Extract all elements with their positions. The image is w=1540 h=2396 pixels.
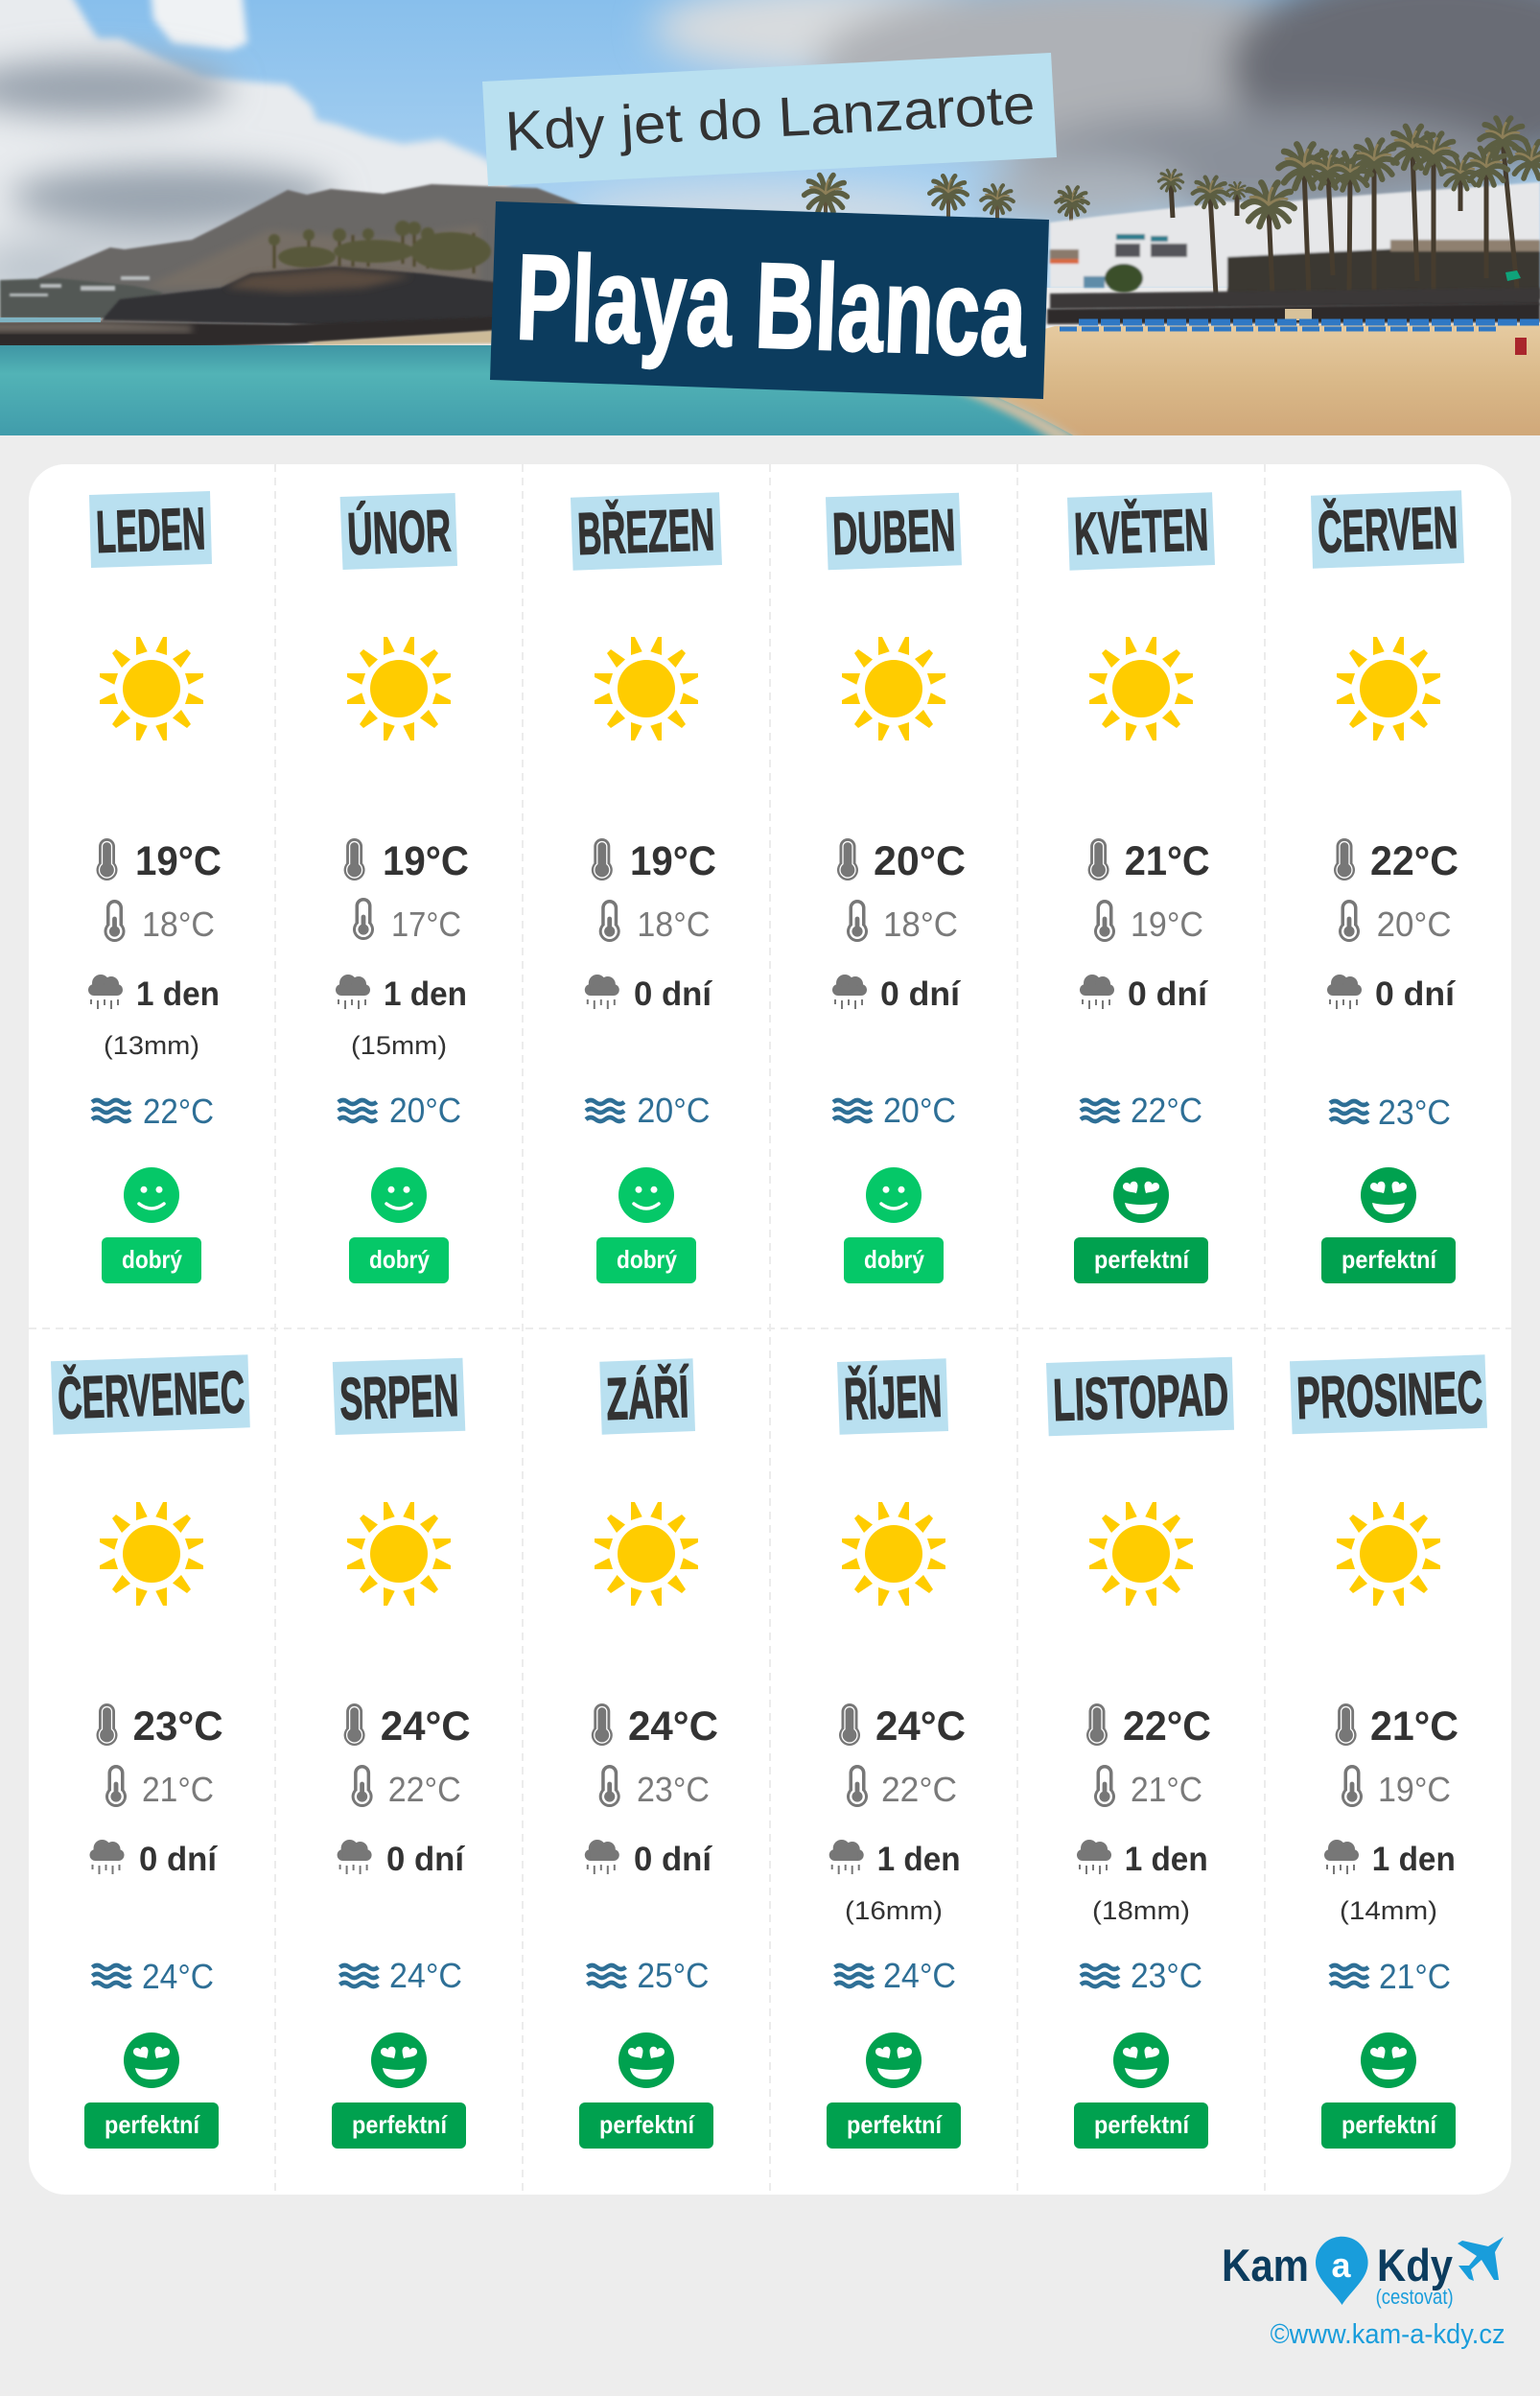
icon: love face (618, 2032, 674, 2088)
header title: Playa Blanca: Playa Blanca (514, 228, 1030, 383)
rating badge (332, 2102, 466, 2149)
icon: plane (1458, 2237, 1504, 2281)
icon: thermometer high (592, 1703, 613, 1746)
logo word: Kam: Kam (1222, 2240, 1309, 2290)
low temperature: 21°C (142, 1770, 214, 1809)
low temperature: 22°C (881, 1770, 957, 1809)
month label: ZÁŘÍ (605, 1364, 690, 1433)
high temperature: 24°C (875, 1703, 966, 1750)
icon: thermometer low (1339, 900, 1360, 942)
icon: thermometer low (104, 900, 125, 942)
sand (997, 324, 1540, 435)
high temperature: 24°C (381, 1703, 471, 1750)
rainfall: (18mm) (1092, 1896, 1190, 1925)
icon: sun (1337, 637, 1440, 740)
rating badge (844, 1237, 944, 1283)
rainy days: 1 den (136, 975, 220, 1013)
far shore (0, 278, 163, 318)
panel: DUBEN (826, 493, 966, 1283)
rainy days: 1 den (1125, 1841, 1208, 1878)
icon: waves (1330, 1965, 1368, 1986)
month label (1067, 492, 1215, 571)
water temperature: 24°C (389, 1956, 462, 1995)
water temperature: 20°C (389, 1091, 461, 1130)
icon: waves (1330, 1101, 1368, 1122)
icon: thermometer low (599, 900, 620, 942)
header tag: Kdy jet do Lanzarote (482, 53, 1057, 186)
icon: love face (866, 2032, 922, 2088)
rating badge: dobrý (617, 1245, 677, 1274)
rating badge: perfektní (1094, 1245, 1190, 1274)
month label (599, 1358, 695, 1435)
rating badge (102, 1237, 201, 1283)
icon: love face (1113, 2032, 1169, 2088)
water temperature: 22°C (1131, 1091, 1202, 1130)
rating badge (596, 1237, 696, 1283)
icon: waves (1081, 1965, 1119, 1986)
low temperature: 21°C (1131, 1770, 1202, 1809)
icon: smiley (371, 1167, 427, 1223)
water temperature: 21°C (1379, 1957, 1451, 1996)
icon: love face (124, 2032, 179, 2088)
icon: smiley (124, 1167, 179, 1223)
high temperature: 19°C (135, 838, 222, 884)
month label: LEDEN (95, 496, 206, 566)
icon: sun (842, 637, 945, 740)
low temperature: 19°C (1131, 904, 1203, 944)
icon: sun (100, 637, 203, 740)
high temperature: 19°C (383, 838, 469, 884)
icon: thermometer high (837, 838, 858, 881)
cliff palms (268, 221, 491, 273)
rainy days: 0 dní (1128, 975, 1208, 1013)
icon: thermometer high (96, 1703, 117, 1746)
month label (1046, 1357, 1234, 1436)
rating badge (1321, 2102, 1456, 2149)
low temperature: 20°C (1377, 904, 1452, 944)
rainy days: 1 den (384, 975, 467, 1013)
water temperature: 22°C (143, 1092, 214, 1131)
rating badge (349, 1237, 449, 1283)
rating badge: perfektní (1342, 2110, 1437, 2139)
low temperature: 18°C (142, 904, 215, 944)
icon: sun (595, 1502, 698, 1606)
rating badge: perfektní (847, 2110, 943, 2139)
icon: rain cloud (336, 975, 370, 1009)
rating badge: dobrý (864, 1245, 924, 1274)
high temperature: 22°C (1370, 838, 1458, 884)
sea (0, 345, 1074, 435)
icon: thermometer high (344, 1703, 365, 1746)
month label: SRPEN (338, 1363, 459, 1433)
high temperature: 21°C (1125, 838, 1210, 884)
icon: thermometer high (1088, 838, 1109, 881)
breakwater (0, 317, 492, 345)
icon: love face (371, 2032, 427, 2088)
high temperature: 19°C (630, 838, 716, 884)
icon: thermometer low (352, 1765, 373, 1807)
rainy days: 0 dní (1375, 975, 1456, 1013)
month label: DUBEN (831, 498, 956, 568)
icon: love face (1361, 1167, 1416, 1223)
rating badge (1074, 2102, 1208, 2149)
icon: waves (587, 1965, 625, 1986)
low temperature: 19°C (1378, 1770, 1451, 1809)
rating badge (1074, 1237, 1208, 1283)
water temperature: 20°C (637, 1091, 710, 1130)
panel: ŘÍJEN (827, 1358, 966, 2149)
header photo: Playa Blanca beach (0, 0, 1540, 441)
rainfall: (15mm) (351, 1031, 447, 1060)
icon: rain cloud (829, 1840, 864, 1874)
icon: rain cloud (1324, 1840, 1359, 1874)
icon: waves (1081, 1100, 1119, 1121)
month label: ÚNOR (346, 498, 452, 568)
rating badge (827, 2102, 961, 2149)
water temperature: 24°C (883, 1956, 956, 1995)
website credit: ©www.kam-a-kdy.cz (1271, 2319, 1505, 2350)
white clouds left (0, 0, 508, 288)
icon: sun (595, 637, 698, 740)
water temperature: 20°C (883, 1091, 956, 1130)
panel: LISTOPAD (1046, 1357, 1234, 2149)
icon: thermometer high (1334, 838, 1355, 881)
icon: rain cloud (1327, 975, 1362, 1009)
icon: map pin with a: a (1331, 2245, 1351, 2285)
icon: thermometer low (847, 900, 868, 942)
month label (51, 1354, 250, 1435)
low temperature: 18°C (637, 904, 710, 944)
icon: rain cloud (585, 1840, 619, 1874)
grey clouds right (575, 0, 1540, 245)
icon: map pin with a (1316, 2237, 1368, 2305)
rainy days: 1 den (877, 1841, 961, 1878)
rating badge: perfektní (352, 2110, 448, 2139)
high temperature: 24°C (628, 1703, 718, 1750)
rating badge: perfektní (1094, 2110, 1190, 2139)
icon: rain cloud (1077, 1840, 1111, 1874)
icon: rain cloud (88, 975, 123, 1009)
rating badge: perfektní (599, 2110, 695, 2139)
white buildings (1050, 182, 1540, 299)
panel: ÚNOR (336, 493, 469, 1283)
panel: LEDEN (88, 491, 222, 1283)
low temperature: 18°C (883, 904, 958, 944)
month label (89, 491, 212, 568)
logo: Kam a Kdy (cestovat) (1222, 2237, 1504, 2309)
far palms (824, 200, 1073, 222)
cliff (101, 267, 503, 328)
icon: sun (347, 637, 451, 740)
month label (837, 1358, 948, 1435)
panel: ZÁŘÍ (579, 1358, 718, 2149)
icon: sun (842, 1502, 945, 1606)
month label: ŘÍJEN (843, 1363, 943, 1433)
blue loungers (1060, 322, 1540, 329)
logo tagline: (cestovat) (1376, 2285, 1454, 2309)
high temperature: 22°C (1123, 1703, 1211, 1750)
icon: rain cloud (832, 975, 867, 1009)
water temperature: 25°C (637, 1956, 709, 1995)
low temperature: 22°C (388, 1770, 461, 1809)
icon: waves (835, 1965, 874, 1986)
panel: ČERVEN (1311, 490, 1464, 1283)
icon: sun (100, 1502, 203, 1606)
icon: thermometer low (1342, 1765, 1363, 1807)
header tag: Kdy jet do Lanzarote: Kdy jet do Lanzarote (503, 73, 1037, 163)
rainy days: 0 dní (386, 1841, 465, 1878)
month label (571, 492, 722, 571)
month label (333, 1358, 465, 1435)
icon: rain cloud (338, 1840, 372, 1874)
rainfall: (13mm) (104, 1031, 199, 1060)
rating badge: dobrý (369, 1245, 430, 1274)
water temperature: 23°C (1378, 1092, 1451, 1132)
icon: waves (92, 1100, 130, 1121)
beach promenade and wall (1050, 288, 1540, 309)
rainy days: 0 dní (634, 975, 712, 1013)
rating badge: perfektní (105, 2110, 200, 2139)
palms (1171, 141, 1518, 297)
icon: thermometer low (1094, 900, 1115, 942)
icon: rain cloud (1080, 975, 1114, 1009)
panel: ČERVENEC (51, 1354, 250, 2149)
icon: smiley (618, 1167, 674, 1223)
high temperature: 20°C (874, 838, 966, 884)
icon: sun (1337, 1502, 1440, 1606)
panel: climate table card (29, 464, 1511, 2195)
panel: SRPEN (332, 1358, 471, 2149)
rainy days: 0 dní (139, 1841, 218, 1878)
panel: KVĚTEN (1067, 492, 1215, 1283)
icon: smiley (866, 1167, 922, 1223)
icon: waves (92, 1965, 130, 1986)
month label: ČERVENEC (57, 1359, 245, 1432)
icon: love face (1113, 1167, 1169, 1223)
icon: sun (1089, 637, 1193, 740)
rating badge: dobrý (122, 1245, 182, 1274)
rating badge (84, 2102, 219, 2149)
rainy days: 1 den (1372, 1841, 1456, 1878)
high temperature: 21°C (1370, 1703, 1458, 1750)
icon: thermometer high (96, 838, 117, 881)
icon: thermometer low (105, 1765, 127, 1807)
low temperature: 17°C (391, 904, 461, 944)
rating badge (579, 2102, 713, 2149)
month label (340, 493, 457, 570)
low temperature: 23°C (637, 1770, 710, 1809)
icon: thermometer high (1086, 1703, 1108, 1746)
icon: thermometer low (353, 898, 374, 940)
icon: thermometer high (1336, 1703, 1357, 1746)
icon: thermometer low (599, 1765, 620, 1807)
rainy days: 0 dní (634, 1841, 712, 1878)
rainfall: (14mm) (1340, 1896, 1437, 1925)
rainy days: 0 dní (880, 975, 961, 1013)
icon: love face (1361, 2032, 1416, 2088)
rating badge: perfektní (1342, 1245, 1437, 1274)
icon: rain cloud (90, 1840, 125, 1874)
water temperature: 23°C (1131, 1956, 1202, 1995)
logo word: Kdy: Kdy (1377, 2240, 1453, 2290)
panel: PROSINEC (1290, 1354, 1487, 2149)
icon: rain cloud (585, 975, 619, 1009)
water temperature: 24°C (142, 1957, 214, 1996)
rating badge (1321, 1237, 1456, 1283)
month label: KVĚTEN (1073, 497, 1209, 568)
icon: thermometer high (839, 1703, 860, 1746)
panel: BŘEZEN (571, 492, 722, 1283)
month label: LISTOPAD (1052, 1362, 1229, 1434)
month label (1311, 490, 1464, 569)
icon: waves (338, 1100, 377, 1121)
mountain (37, 182, 584, 296)
icon: thermometer low (1094, 1765, 1115, 1807)
icon: thermometer high (592, 838, 613, 881)
icon: sun (347, 1502, 451, 1606)
icon: waves (339, 1965, 378, 1986)
icon: thermometer low (847, 1765, 868, 1807)
high temperature: 23°C (133, 1703, 223, 1750)
icon: thermometer high (344, 838, 365, 881)
month label: BŘEZEN (576, 497, 715, 568)
header title: Playa Blanca (490, 201, 1049, 399)
icon: sun (1089, 1502, 1193, 1606)
icon: waves (833, 1100, 872, 1121)
icon: waves (586, 1100, 624, 1121)
rainfall: (16mm) (845, 1896, 943, 1925)
month label (826, 493, 962, 570)
